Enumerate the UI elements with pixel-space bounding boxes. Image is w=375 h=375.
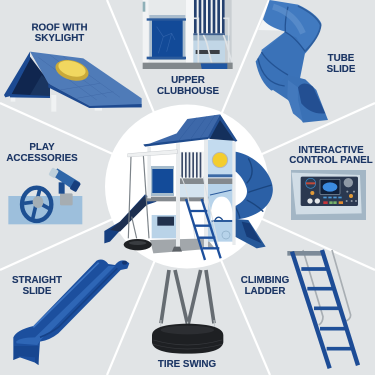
panel: upper clubhouse [143,0,233,97]
heading: interactive control panel: CONTROL PANEL [289,155,373,166]
heading: straight slide: SLIDE [23,286,52,297]
heading: climbing ladder: CLIMBING [241,275,289,286]
panel: climbing ladder [241,250,358,368]
panel: tube slide [256,0,356,123]
heading: interactive control panel: INTERACTIVE [298,145,364,156]
panel: roof with skylight [4,22,142,112]
panel: interactive control panel [289,145,373,220]
icon: straight slide [13,260,129,365]
icon: tube slide [256,0,328,123]
icon: climbing ladder [287,250,358,368]
heading: upper clubhouse: CLUBHOUSE [157,86,219,97]
heading: play accessories: PLAY [29,142,55,153]
panel: play accessories [6,142,82,224]
heading: roof with skylight: ROOF WITH [31,22,88,34]
icon: control panel [291,170,366,220]
heading: tire swing: TIRE SWING [158,359,216,370]
heading: tube slide: TUBE [328,53,354,64]
illustration: complete playset [104,114,273,260]
icon: roof with skylight [4,52,142,112]
heading: tube slide: SLIDE [327,64,356,75]
heading: roof with skylight: SKYLIGHT [35,33,84,44]
icon: play accessories [8,167,82,224]
heading: upper clubhouse: UPPER [171,75,205,86]
panel: central playset [104,104,273,268]
panel: tire swing [152,270,223,370]
heading: straight slide: STRAIGHT [12,275,62,286]
panel: straight slide [12,260,129,365]
white circle [105,104,269,268]
heading: climbing ladder: LADDER [245,286,285,297]
icon: tire swing [152,270,223,354]
heading: play accessories: ACCESSORIES [6,153,78,164]
icon: upper clubhouse [143,0,233,69]
